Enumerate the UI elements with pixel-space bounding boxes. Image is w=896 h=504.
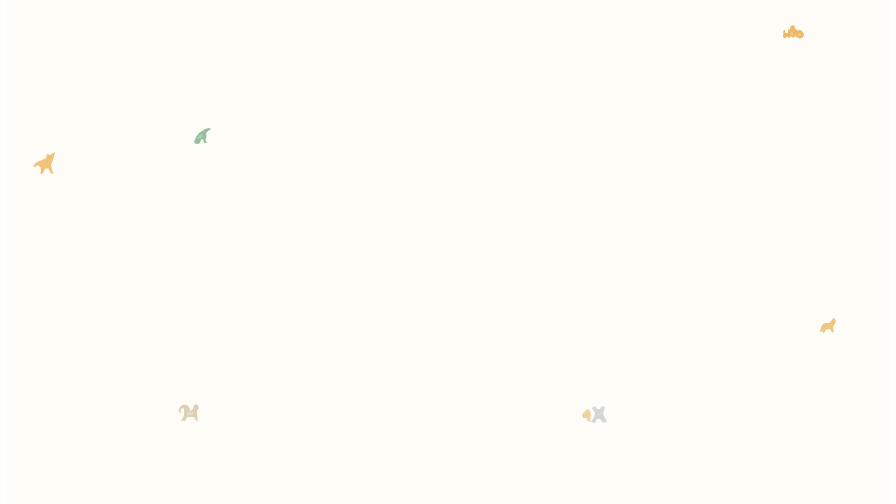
icon: orange dog right [820,318,836,333]
icon: beige animal with curled tail [179,404,199,421]
icon: green animal [194,128,211,144]
icon: grey animal [591,406,607,423]
icon: orange dog left [33,152,55,174]
icon: orange and grey animals [582,406,607,423]
icon: small orange animal [582,409,591,422]
icon: orange animals top right [783,25,804,38]
